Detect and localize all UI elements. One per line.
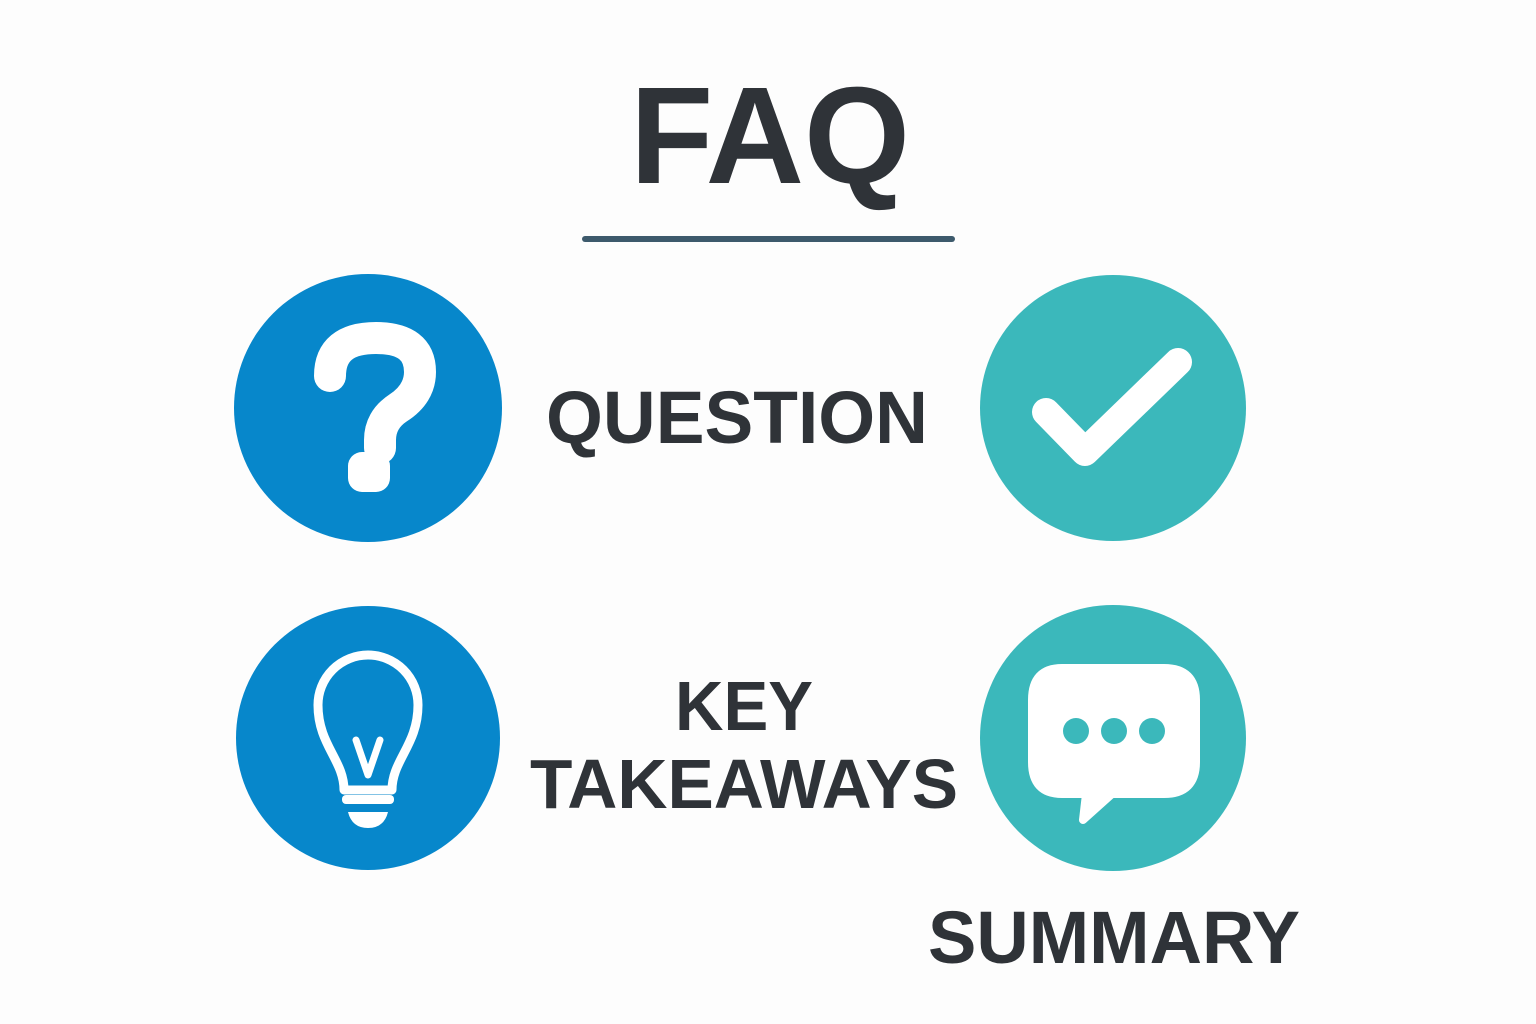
icon: chat bubble circle [980,605,1246,871]
title underline [582,236,955,242]
label: question: QUESTION [546,376,928,459]
icon: question mark circle [234,274,502,542]
icon: lightbulb circle [236,606,500,870]
title: FAQ [630,59,910,213]
label: key takeaways [530,667,958,823]
icon: check mark circle [980,275,1246,541]
label: key takeaways: TAKEAWAYS [530,745,958,823]
label: key takeaways: KEY [675,667,813,745]
label: summary: SUMMARY [928,896,1300,979]
chat dots [1063,718,1165,744]
